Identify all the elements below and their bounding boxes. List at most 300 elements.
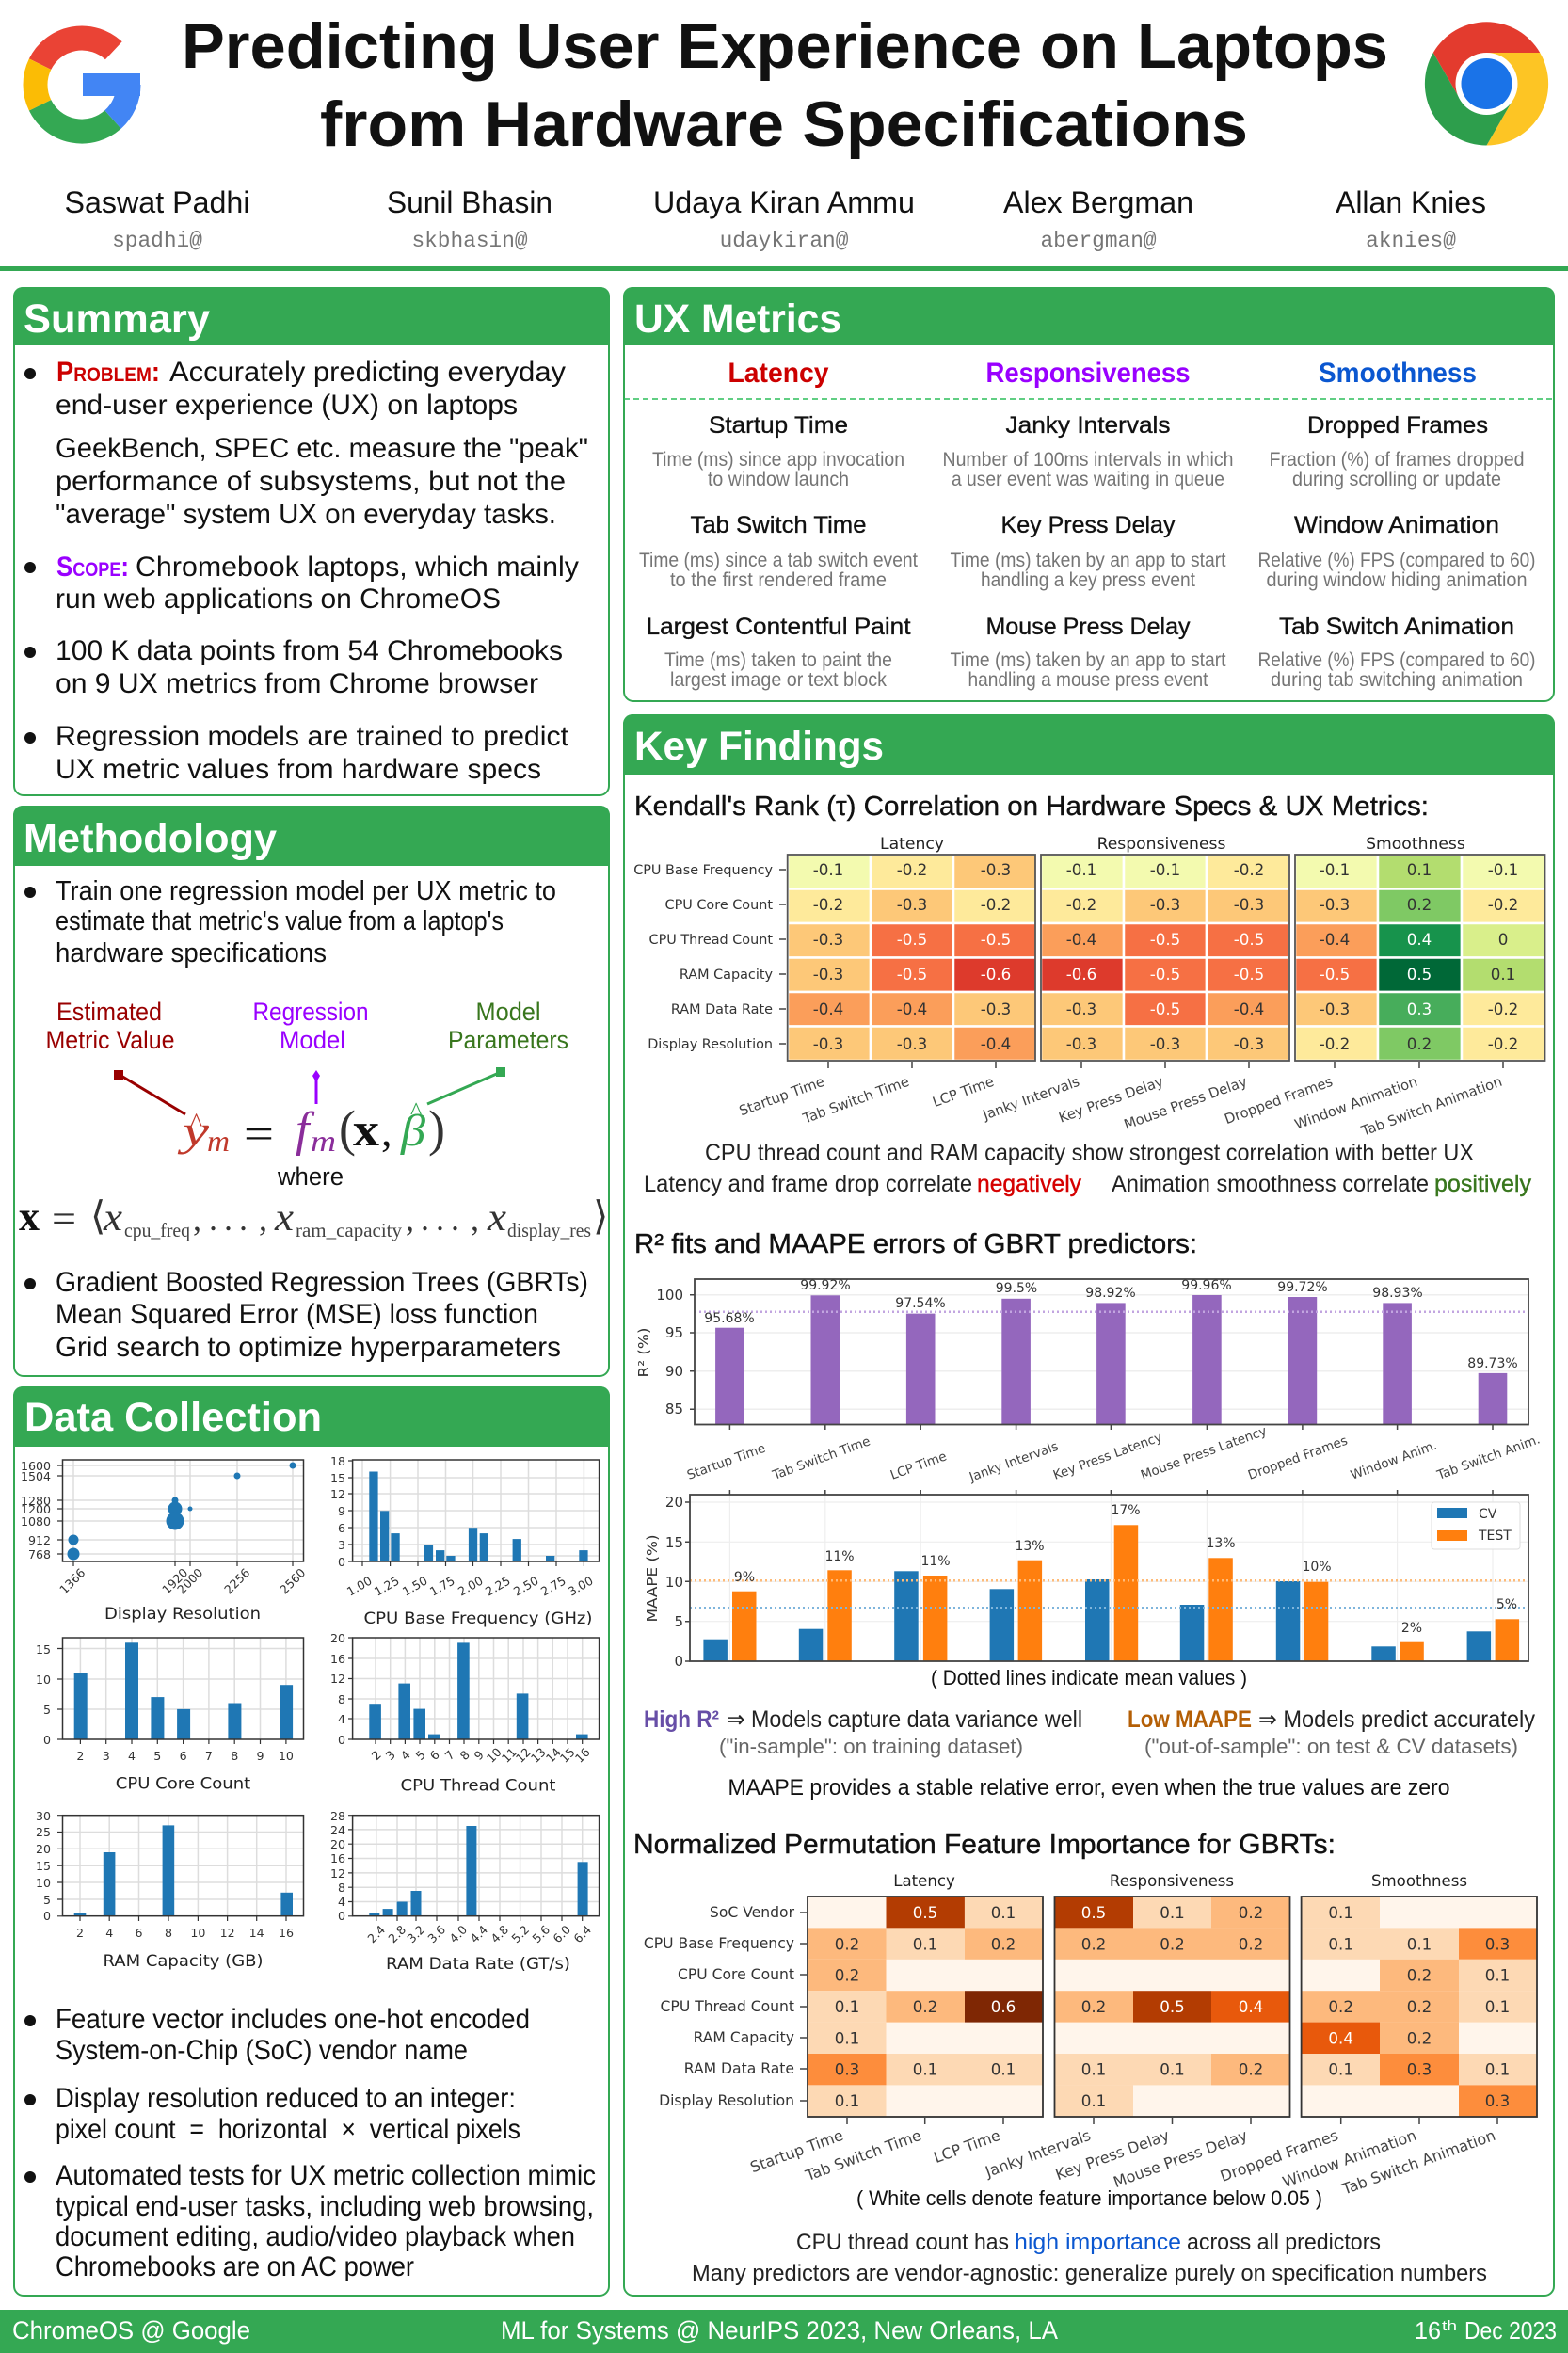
bar chart: R2: Tab Switch Anim.: [1434, 1432, 1542, 1483]
bar chart: R2: Key Press Latency: [1051, 1430, 1164, 1483]
heatmap: permutation feature importance: 0.1: [1328, 1903, 1353, 1922]
feature vector equation: ,: [193, 1200, 201, 1238]
heatmap: Kendall correlation: LCP Time: [931, 1074, 996, 1111]
heatmap: Kendall correlation: -0.3: [897, 1034, 927, 1053]
heatmap: permutation feature importance: 0.1: [991, 2059, 1016, 2078]
text: correlation takeaways: CPU thread count and RAM capacity show strongest correlation with better UX: [705, 1140, 1474, 1166]
heatmap: Kendall correlation: -0.1: [1488, 860, 1518, 879]
heatmap: Kendall correlation: -0.4: [981, 1034, 1011, 1053]
chart: RAM data rate: 20: [330, 1837, 345, 1851]
chart: CPU thread count: 4: [338, 1712, 345, 1726]
column: latency: Time (ms) since app invocation: [652, 449, 904, 471]
heatmap: Kendall correlation: -0.3: [813, 930, 843, 949]
chart: CPU base frequency: 9: [338, 1504, 345, 1518]
heatmap: Kendall correlation: -0.5: [1234, 965, 1264, 984]
text: importance takeaways: high importance: [1015, 2230, 1181, 2255]
heatmap: permutation feature importance: 0.3: [835, 2059, 859, 2078]
equation: ,: [381, 1107, 392, 1155]
panel: data collection: typical end-user tasks, including web browsing,: [56, 2191, 594, 2222]
heatmap: permutation feature importance: 0.4: [1239, 1997, 1263, 2016]
column: smoothness: Fraction (%) of frames dropped: [1269, 449, 1525, 471]
chart: RAM data rate: 28: [330, 1809, 345, 1823]
footer: 16: [1415, 2316, 1441, 2345]
column: responsiveness: Mouse Press Delay: [986, 614, 1191, 640]
chart: display resolution scatter: 912: [28, 1533, 51, 1547]
authors: udaykiran@: [720, 229, 849, 253]
bar chart: R2: 90: [665, 1363, 683, 1380]
chart: CPU thread count: 12: [330, 1672, 345, 1686]
legend: TEST: [1478, 1529, 1512, 1544]
chart: display resolution scatter: 1080: [21, 1514, 51, 1529]
text: R2 and MAAPE takeaways: ⇒ Models capture data variance well: [727, 1706, 1082, 1733]
authors: Udaya Kiran Ammu: [653, 185, 915, 219]
chart: RAM data rate: 3.6: [424, 1922, 448, 1945]
heatmap: permutation feature importance: 0.1: [1485, 2059, 1510, 2078]
chart: display resolution scatter: 2560: [277, 1565, 308, 1596]
heatmap: permutation feature importance: Startup Time: [747, 2126, 845, 2176]
heatmap: Kendall correlation: -0.2: [897, 860, 927, 879]
heatmap: Kendall correlation: -0.4: [813, 1000, 843, 1018]
heatmap: Kendall correlation: -0.2: [1066, 895, 1096, 914]
footer: Dec 2023: [1464, 2316, 1557, 2345]
header: [0, 10, 1568, 271]
chart: CPU base frequency: 12: [330, 1487, 345, 1501]
chart: CPU base frequency: 18: [330, 1454, 345, 1468]
panel: UX metrics: UX Metrics: [634, 296, 841, 342]
chart: RAM data rate: 16: [330, 1851, 345, 1865]
heatmap: permutation feature importance: [644, 1872, 1537, 2199]
bar chart: MAAPE: 17%: [1111, 1503, 1141, 1518]
heatmap: Kendall correlation: -0.5: [1150, 930, 1180, 949]
chart: RAM data rate: [330, 1809, 600, 1974]
panel: summary: "average" system UX on everyday tasks.: [56, 499, 556, 530]
panel: methodology: Methodology: [24, 816, 277, 861]
chart: CPU base frequency: 1.25: [372, 1574, 402, 1599]
chart: RAM data rate: 12: [330, 1866, 345, 1881]
heatmap: permutation feature importance: Smoothness: [1371, 1872, 1467, 1890]
icon: Google logo: [35, 38, 140, 132]
feature vector equation: x: [19, 1193, 40, 1240]
bar chart: MAAPE: 11%: [920, 1554, 951, 1569]
bar chart: R2: 95: [665, 1324, 683, 1341]
chart: display resolution scatter: 1200: [21, 1502, 51, 1516]
heatmap: permutation feature importance: 0.1: [835, 2029, 859, 2048]
chart: CPU thread count: 8: [457, 1748, 472, 1763]
heatmap: Kendall correlation: Display Resolution: [648, 1037, 773, 1052]
panel: key findings: [623, 714, 1555, 2296]
text: R2 and MAAPE takeaways: MAAPE provides a stable relative error, even when the true values are zero: [728, 1775, 1449, 1801]
bar chart: MAAPE: 0: [674, 1653, 683, 1670]
heatmap: permutation feature importance: Window Animation: [1280, 2126, 1418, 2191]
panel: data collection: pixel count = horizontal × vertical pixels: [56, 2114, 520, 2145]
text: correlation takeaways: [644, 1140, 1531, 1197]
chart: CPU core count: 15: [36, 1642, 51, 1657]
column: smoothness: Relative (%) FPS (compared to 60): [1257, 550, 1536, 571]
heatmap: Kendall correlation: -0.3: [1234, 1034, 1264, 1053]
panel: summary: Problem:: [56, 357, 160, 388]
feature vector equation: =: [52, 1198, 76, 1241]
heatmap: permutation feature importance: 0.5: [1160, 1997, 1185, 2016]
heatmap: Kendall correlation: -0.3: [1150, 895, 1180, 914]
heatmap: Kendall correlation: -0.2: [1320, 1034, 1350, 1053]
heading: R2 fits: R² fits and MAAPE errors of GBRT predictors:: [634, 1229, 1197, 1259]
heatmap: Kendall correlation: Tab Switch Time: [800, 1074, 911, 1128]
bar chart: R2: 97.54%: [895, 1296, 946, 1311]
panel: summary: UX metric values from hardware specs: [56, 754, 541, 785]
chart: RAM data rate: 2.4: [364, 1922, 388, 1945]
heatmap: Kendall correlation: -0.3: [1066, 1034, 1096, 1053]
bar chart: MAAPE: 10%: [1302, 1560, 1332, 1575]
authors: Allan Knies: [1336, 185, 1486, 219]
column: smoothness: during tab switching animation: [1271, 669, 1523, 691]
chart: CPU base frequency: 1.00: [344, 1574, 375, 1599]
heatmap: permutation feature importance: Display Resolution: [659, 2092, 794, 2109]
bar chart: MAAPE: 9%: [734, 1570, 755, 1585]
column: smoothness: during scrolling or update: [1292, 469, 1501, 490]
heatmap: permutation feature importance: Dropped Frames: [1218, 2126, 1340, 2185]
heatmap: permutation feature importance: CPU Core Count: [678, 1966, 794, 1983]
panel: data collection: [13, 1386, 610, 2296]
chart: display resolution scatter: 1920: [159, 1565, 190, 1596]
chart: display resolution scatter: 2000: [174, 1565, 205, 1596]
panel: data collection: Data Collection: [24, 1395, 322, 1440]
chart: RAM capacity: 12: [220, 1926, 235, 1940]
heatmap: permutation feature importance: CPU Base Frequency: [644, 1935, 794, 1952]
chart: CPU thread count: 20: [330, 1631, 345, 1645]
heatmap: permutation feature importance: 0.2: [1407, 1965, 1432, 1984]
bar chart: R2: 98.93%: [1372, 1286, 1423, 1301]
chart: display resolution scatter: 1600: [21, 1459, 51, 1473]
title: [182, 10, 1388, 160]
panel: methodology: Mean Squared Error (MSE) loss function: [56, 1299, 538, 1330]
chart: display resolution scatter: Display Resolution: [104, 1605, 261, 1624]
annotation: regression model: Regression: [252, 998, 369, 1026]
heatmap: Kendall correlation: -0.5: [1150, 965, 1180, 984]
chart: CPU base frequency: 2.50: [511, 1574, 541, 1599]
title: from Hardware Specifications: [320, 88, 1248, 160]
equation: ): [428, 1100, 445, 1157]
chart: CPU thread count: 8: [338, 1692, 345, 1706]
column: responsiveness: Janky Intervals: [1005, 412, 1171, 439]
heatmap: Kendall correlation: 0.2: [1407, 895, 1432, 914]
panel: summary: [13, 287, 610, 795]
footer: ML for Systems @ NeurIPS 2023, New Orleans, LA: [501, 2316, 1058, 2345]
heatmap: permutation feature importance: 0.1: [835, 1997, 859, 2016]
panel: key findings: Key Findings: [634, 724, 884, 769]
panel: methodology: hardware specifications: [56, 938, 327, 968]
panel: summary: end-user experience (UX) on laptops: [56, 390, 518, 421]
chart: display resolution scatter: 1504: [21, 1469, 51, 1483]
heatmap: permutation feature importance: 0.1: [1328, 1935, 1353, 1954]
heatmap: permutation feature importance: 0.2: [1407, 2029, 1432, 2048]
note: white cells: ( White cells denote feature importance below 0.05 ): [856, 2186, 1322, 2210]
heatmap: permutation feature importance: 0.2: [1081, 1935, 1106, 1954]
panel: methodology: Gradient Boosted Regression Trees (GBRTs): [56, 1267, 588, 1298]
chart: CPU base frequency: 3.00: [566, 1574, 596, 1599]
chart: CPU core count: 8: [231, 1749, 238, 1763]
heatmap: permutation feature importance: LCP Time: [931, 2126, 1002, 2167]
heatmap: permutation feature importance: 0.2: [1239, 2059, 1263, 2078]
text: R2 and MAAPE takeaways: [644, 1706, 1535, 1801]
panel: data collection: Automated tests for UX metric collection mimic: [56, 2160, 596, 2191]
bar chart: R2: 99.96%: [1181, 1278, 1232, 1293]
chart: RAM data rate: 2.8: [385, 1922, 408, 1945]
heatmap: Kendall correlation: -0.5: [897, 930, 927, 949]
column: smoothness: Dropped Frames: [1307, 412, 1488, 439]
heatmap: Kendall correlation: 0: [1498, 930, 1508, 949]
chart: CPU thread count: 16: [572, 1745, 593, 1766]
heatmap: permutation feature importance: 0.1: [1485, 1965, 1510, 1984]
column: latency: to window launch: [708, 469, 849, 490]
column: smoothness: Smoothness: [1319, 358, 1477, 389]
column: responsiveness: Responsiveness: [986, 358, 1190, 389]
panel: methodology: where: [277, 1162, 344, 1191]
bar chart: MAAPE: 5: [674, 1613, 683, 1630]
heatmap: Kendall correlation: 0.5: [1407, 965, 1432, 984]
bar chart: MAAPE: 13%: [1206, 1536, 1236, 1551]
feature vector equation: ⟨: [90, 1195, 105, 1239]
heatmap: permutation feature importance: 0.1: [991, 1903, 1016, 1922]
bar chart: R2: LCP Time: [888, 1449, 949, 1483]
text: R2 and MAAPE takeaways: ("out-of-sample": on test & CV datasets): [1144, 1735, 1518, 1758]
heatmap: permutation feature importance: 0.1: [913, 2059, 937, 2078]
panel: summary: Chromebook laptops, which mainly: [136, 552, 579, 583]
legend: [1432, 1502, 1520, 1549]
chart: RAM capacity: [36, 1809, 303, 1971]
bar chart: R2: Dropped Frames: [1246, 1433, 1350, 1483]
chart: CPU core count: 5: [43, 1703, 51, 1717]
column: responsiveness: Number of 100ms intervals in which: [943, 449, 1233, 471]
equation: y: [178, 1107, 210, 1155]
column: responsiveness: a user event was waiting in queue: [952, 469, 1224, 490]
heatmap: permutation feature importance: 0.1: [1407, 1935, 1432, 1954]
equation: ^: [190, 1109, 202, 1138]
heatmap: permutation feature importance: 0.1: [835, 2091, 859, 2110]
heatmap: permutation feature importance: 0.5: [913, 1903, 937, 1922]
chart: CPU core count: 10: [279, 1749, 294, 1763]
footer: [0, 2310, 1568, 2353]
heatmap: Kendall correlation: 0.1: [1407, 860, 1432, 879]
chart: RAM data rate: 4.0: [446, 1922, 470, 1945]
authors: Sunil Bhasin: [387, 185, 552, 219]
heatmap: Kendall correlation: Tab Switch Animation: [1358, 1074, 1504, 1140]
chart: RAM data rate: 5.2: [508, 1922, 532, 1945]
heatmap: permutation feature importance: 0.2: [835, 1935, 859, 1954]
column: latency: Latency: [728, 358, 829, 389]
panel: data collection: System-on-Chip (SoC) vendor name: [56, 2035, 468, 2066]
heatmap: permutation feature importance: RAM Data Rate: [684, 2060, 794, 2077]
text: correlation takeaways: negatively: [977, 1171, 1081, 1197]
heatmap: Kendall correlation: CPU Core Count: [665, 898, 773, 913]
legend: CV: [1479, 1507, 1497, 1522]
bar chart: R2: R² (%): [635, 1327, 652, 1378]
column: responsiveness: Key Press Delay: [1001, 512, 1176, 538]
chart: CPU thread count: 3: [383, 1748, 398, 1763]
heatmap: Kendall correlation: Mouse Press Delay: [1122, 1074, 1250, 1133]
equation: m: [311, 1124, 336, 1158]
heatmap: permutation feature importance: Key Press Delay: [1053, 2126, 1172, 2184]
authors: skbhasin@: [411, 229, 528, 253]
text: R2 and MAAPE takeaways: Low MAAPE: [1128, 1706, 1252, 1733]
annotation: regression model: Model: [280, 1026, 345, 1054]
chart: CPU base frequency: 6: [338, 1521, 345, 1535]
chart: CPU thread count: 5: [413, 1748, 428, 1763]
heatmap: Kendall correlation: -0.5: [897, 965, 927, 984]
heatmap: Kendall correlation: [633, 835, 1545, 1140]
heatmap: Kendall correlation: -0.5: [981, 930, 1011, 949]
bar chart: MAAPE: MAAPE (%): [644, 1534, 661, 1623]
bar chart: MAAPE: 5%: [1496, 1597, 1517, 1612]
column: responsiveness: handling a mouse press event: [968, 669, 1208, 691]
chart: RAM data rate: 4: [338, 1895, 345, 1909]
authors: abergman@: [1040, 229, 1157, 253]
panel: data collection: Display resolution reduced to an integer:: [56, 2083, 516, 2114]
bar chart: R2: 99.72%: [1277, 1280, 1328, 1295]
heatmap: permutation feature importance: 0.2: [1407, 1997, 1432, 2016]
chart: CPU core count: CPU Core Count: [116, 1775, 251, 1794]
heatmap: Kendall correlation: -0.1: [813, 860, 843, 879]
heatmap: permutation feature importance: 0.1: [1081, 2059, 1106, 2078]
heatmap: Kendall correlation: -0.2: [1488, 1000, 1518, 1018]
feature vector equation: x: [487, 1196, 506, 1240]
heatmap: permutation feature importance: RAM Capacity: [694, 2029, 794, 2046]
bar chart: MAAPE: 10: [665, 1574, 683, 1591]
column: smoothness: during window hiding animation: [1267, 569, 1527, 591]
heatmap: Kendall correlation: 0.2: [1407, 1034, 1432, 1053]
text: importance takeaways: across all predictors: [1187, 2230, 1381, 2255]
text: R2 and MAAPE takeaways: ("in-sample": on training dataset): [719, 1735, 1023, 1758]
heatmap: permutation feature importance: Tab Switch Animation: [1339, 2126, 1497, 2199]
chart: CPU core count: 9: [256, 1749, 264, 1763]
chart: RAM capacity: 8: [165, 1926, 172, 1940]
chart: CPU core count: 7: [205, 1749, 213, 1763]
heatmap: Kendall correlation: 0.4: [1407, 930, 1432, 949]
chart: RAM data rate: 6.0: [550, 1922, 573, 1945]
column: responsiveness: Time (ms) taken by an app to start: [951, 649, 1226, 671]
heatmap: Kendall correlation: Responsiveness: [1097, 835, 1225, 854]
heatmap: Kendall correlation: -0.3: [897, 895, 927, 914]
chart: CPU thread count: 10: [484, 1745, 504, 1766]
chart: CPU thread count: 2: [369, 1748, 384, 1763]
chart: RAM data rate: 3.2: [404, 1922, 427, 1945]
heatmap: permutation feature importance: 0.2: [1239, 1935, 1263, 1954]
heatmap: permutation feature importance: 0.4: [1328, 2029, 1353, 2048]
panel: summary: on 9 UX metrics from Chrome browser: [56, 668, 538, 699]
chart: RAM capacity: 14: [249, 1926, 264, 1940]
annotation: regression model: [252, 998, 369, 1104]
bar chart: R2: Startup Time: [685, 1441, 768, 1483]
chart: CPU thread count: [330, 1631, 600, 1796]
heatmap: Kendall correlation: -0.4: [1066, 930, 1096, 949]
feature vector equation: x: [103, 1196, 122, 1240]
chart: CPU base frequency: 3: [338, 1538, 345, 1552]
heatmap: Kendall correlation: -0.4: [1234, 1000, 1264, 1018]
chart: CPU base frequency: 15: [330, 1471, 345, 1485]
chart: CPU base frequency: 2.00: [456, 1574, 486, 1599]
heatmap: Kendall correlation: -0.3: [1150, 1034, 1180, 1053]
column: latency: largest image or text block: [670, 669, 887, 691]
text: correlation takeaways: Animation smoothness correlate: [1112, 1171, 1429, 1197]
bar chart: R2: 99.92%: [800, 1278, 851, 1293]
chart: CPU base frequency: 2.75: [538, 1574, 568, 1599]
feature vector equation: ...: [421, 1200, 466, 1238]
chart: CPU base frequency: CPU Base Frequency (GHz): [363, 1609, 593, 1628]
heatmap: Kendall correlation: -0.6: [981, 965, 1011, 984]
text: correlation takeaways: positively: [1434, 1171, 1531, 1197]
heatmap: permutation feature importance: 0.2: [1160, 1935, 1185, 1954]
heatmap: Kendall correlation: -0.1: [1066, 860, 1096, 879]
chart: RAM capacity: 30: [36, 1809, 51, 1823]
authors: spadhi@: [112, 229, 202, 253]
heatmap: Kendall correlation: -0.3: [813, 965, 843, 984]
chart: CPU thread count: CPU Thread Count: [401, 1777, 556, 1796]
authors: [64, 185, 1486, 253]
chart: RAM capacity: 10: [36, 1876, 51, 1890]
bar chart: R2: 98.92%: [1085, 1286, 1136, 1301]
panel: summary: Regression models are trained to predict: [56, 721, 569, 752]
panel: methodology: estimate that metric's value from a laptop's: [56, 906, 504, 936]
chart: RAM capacity: 6: [135, 1926, 143, 1940]
chart: RAM data rate: 8: [338, 1881, 345, 1895]
footer: ChromeOS @ Google: [12, 2316, 250, 2345]
annotation: estimated metric value: Estimated: [56, 998, 162, 1026]
chart: CPU core count: 6: [180, 1749, 187, 1763]
panel: methodology: Grid search to optimize hyperparameters: [56, 1332, 561, 1363]
chart: RAM capacity: 20: [36, 1842, 51, 1856]
heatmap: Kendall correlation: -0.3: [981, 1000, 1011, 1018]
equation: β: [400, 1106, 425, 1156]
heatmap: Kendall correlation: Janky Intervals: [980, 1074, 1081, 1124]
panel: data collection: Feature vector includes one-hot encoded: [56, 2004, 530, 2035]
heatmap: permutation feature importance: 0.1: [1160, 2059, 1185, 2078]
chart: CPU base frequency: 1.50: [400, 1574, 430, 1599]
annotation: model parameters: Parameters: [448, 1026, 568, 1054]
heatmap: permutation feature importance: 0.1: [913, 1935, 937, 1954]
bar chart: MAAPE: 11%: [824, 1549, 855, 1564]
feature vector equation: display_res: [507, 1219, 591, 1241]
heatmap: permutation feature importance: 0.3: [1485, 2091, 1510, 2110]
heatmap: Kendall correlation: Key Press Delay: [1057, 1074, 1166, 1127]
heatmap: permutation feature importance: 0.3: [1407, 2059, 1432, 2078]
panel: summary: Scope:: [56, 552, 129, 583]
bar chart: R2: Tab Switch Time: [770, 1433, 872, 1483]
heatmap: Kendall correlation: -0.3: [813, 1034, 843, 1053]
chart: RAM data rate: 4.8: [488, 1922, 511, 1945]
heatmap: permutation feature importance: Mouse Press Delay: [1111, 2126, 1250, 2191]
panel: summary: Summary: [24, 296, 210, 342]
bar chart: MAAPE: [644, 1490, 1528, 1670]
chart: RAM data rate: 4.4: [467, 1922, 490, 1945]
panel: UX metrics: [623, 287, 1555, 701]
panel: data collection: Chromebooks are on AC power: [56, 2251, 414, 2282]
chart: display resolution scatter: [21, 1459, 308, 1624]
chart: CPU core count: 3: [103, 1749, 110, 1763]
column: latency: Tab Switch Time: [691, 512, 866, 538]
heatmap: permutation feature importance: 0.6: [991, 1997, 1016, 2016]
bar chart: MAAPE: 13%: [1015, 1539, 1045, 1554]
heatmap: Kendall correlation: -0.1: [1150, 860, 1180, 879]
bar chart: R2: Mouse Press Latency: [1139, 1423, 1269, 1483]
heatmap: Kendall correlation: -0.3: [981, 860, 1011, 879]
chart: CPU thread count: 15: [557, 1745, 578, 1766]
feature vector equation: ,: [406, 1200, 414, 1238]
annotation: model parameters: Model: [476, 998, 540, 1026]
heatmap: permutation feature importance: 0.2: [835, 1965, 859, 1984]
column: responsiveness: [943, 358, 1233, 691]
chart: RAM capacity: 2: [76, 1926, 84, 1940]
equation: ^: [410, 1097, 422, 1125]
heatmap: Kendall correlation: -0.5: [1320, 965, 1350, 984]
